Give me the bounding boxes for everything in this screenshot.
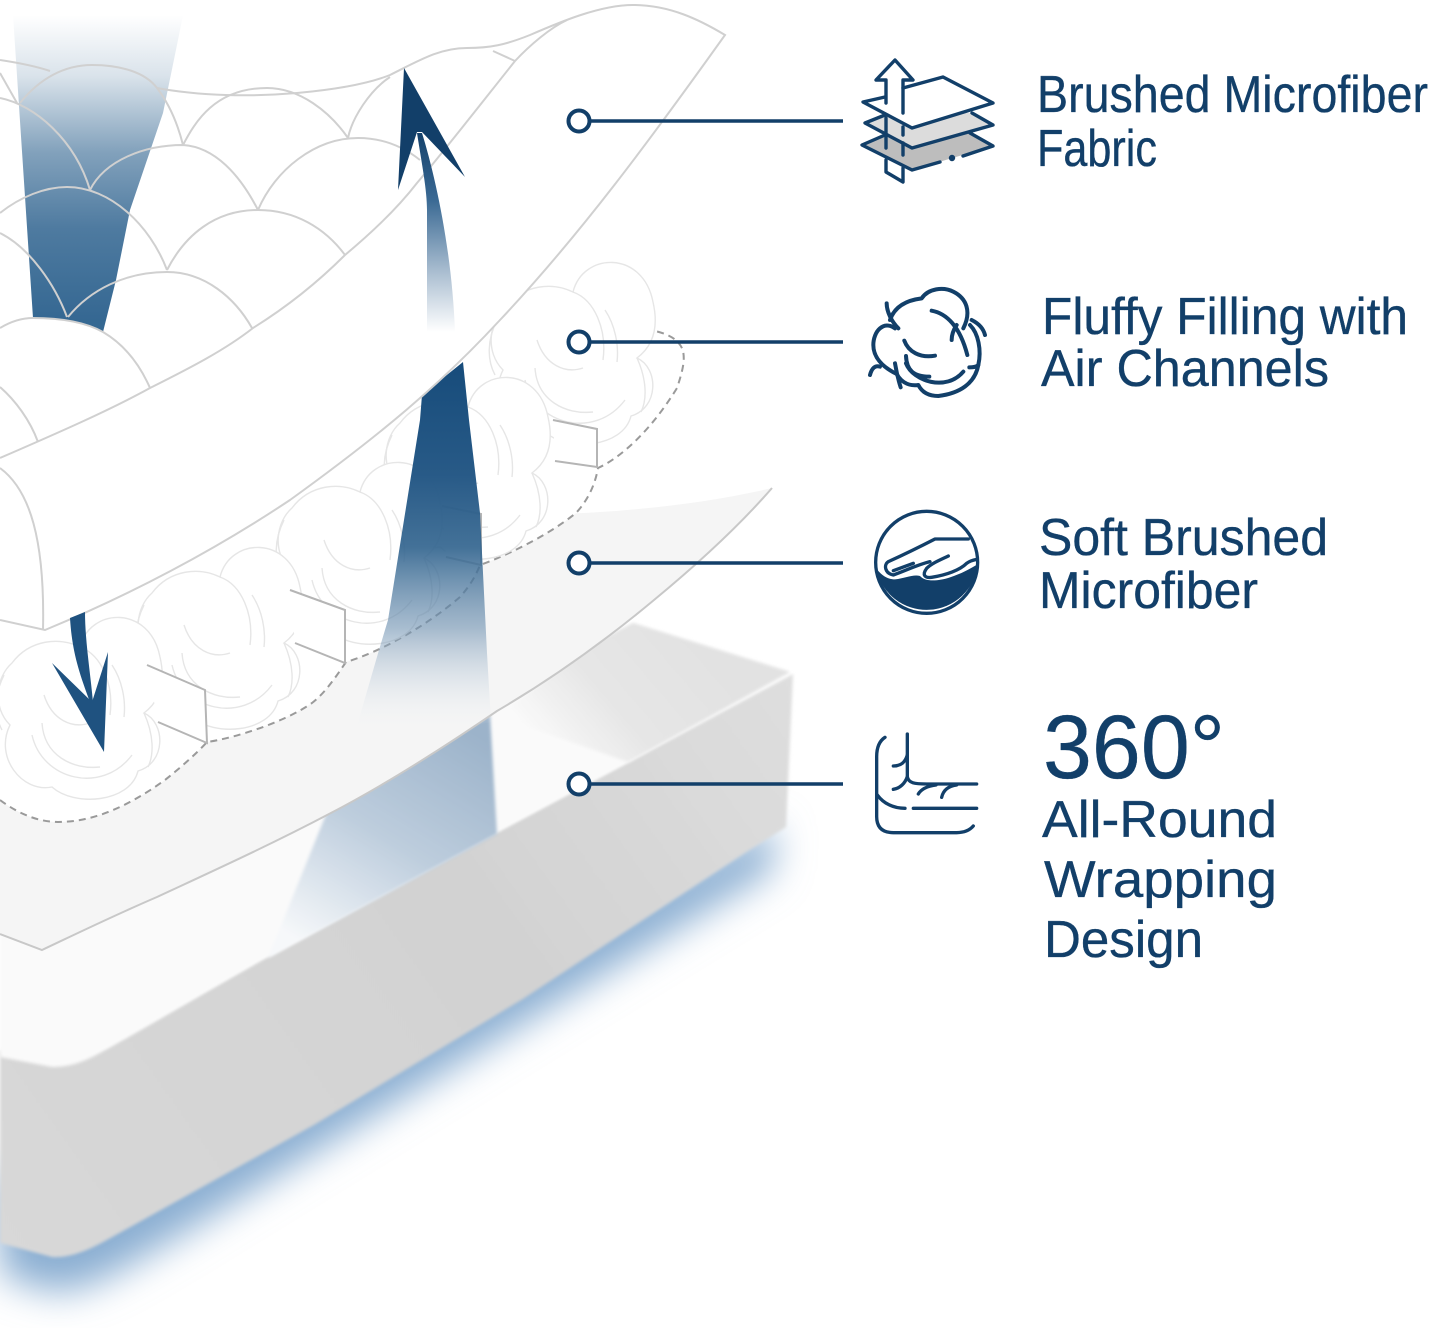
label: 360 all-round wrapping design: Wrapping <box>1044 851 1277 909</box>
lower air beam under sheet <box>268 715 497 958</box>
label: soft brushed microfiber: Soft Brushed <box>1039 509 1328 567</box>
quilting lines <box>0 5 725 630</box>
main upward air beam <box>350 362 491 750</box>
label: 360 all-round wrapping design: All-Round <box>1042 791 1277 849</box>
mattress <box>0 623 793 1257</box>
grey far band <box>497 623 790 762</box>
filling area with dashed boundary <box>0 200 684 822</box>
connector 3 <box>568 552 843 574</box>
icon: cotton boll <box>870 289 985 396</box>
icon: layered fabric <box>862 60 993 182</box>
down arrow <box>52 612 108 752</box>
label: fluffy filling: Air Channels <box>1041 340 1329 398</box>
quilted top layer <box>0 5 725 630</box>
fluffy cotton filling clouds <box>0 262 655 799</box>
icon: all-round wrap corner <box>877 734 977 833</box>
label: fluffy filling <box>1041 288 1408 398</box>
label: soft brushed microfiber <box>1039 509 1328 620</box>
label: fluffy filling: Fluffy Filling with <box>1042 288 1408 346</box>
icon: hand on soft surface <box>876 511 978 613</box>
mattress top face <box>0 623 790 1067</box>
label: brushed microfiber fabric: Fabric <box>1037 120 1157 178</box>
connector 2 <box>568 332 843 352</box>
soft brushed microfiber sheet <box>0 488 772 950</box>
left air beam <box>13 15 183 332</box>
blue shadow under mattress <box>0 825 775 1292</box>
air channel blocks <box>147 420 597 743</box>
connector 1 <box>568 110 843 132</box>
label: 360 all-round wrapping design: Design <box>1044 911 1203 969</box>
label: brushed microfiber fabric <box>1037 66 1428 178</box>
mattress side <box>0 674 793 1257</box>
label: 360 all-round wrapping design: 360° <box>1043 698 1225 798</box>
label: 360 all-round wrapping design <box>1042 698 1277 969</box>
connector 4 <box>568 774 843 794</box>
up arrow <box>398 68 465 332</box>
top layer fill <box>0 5 725 630</box>
label: soft brushed microfiber: Microfiber <box>1039 562 1258 620</box>
sheet lower edge <box>0 488 772 950</box>
